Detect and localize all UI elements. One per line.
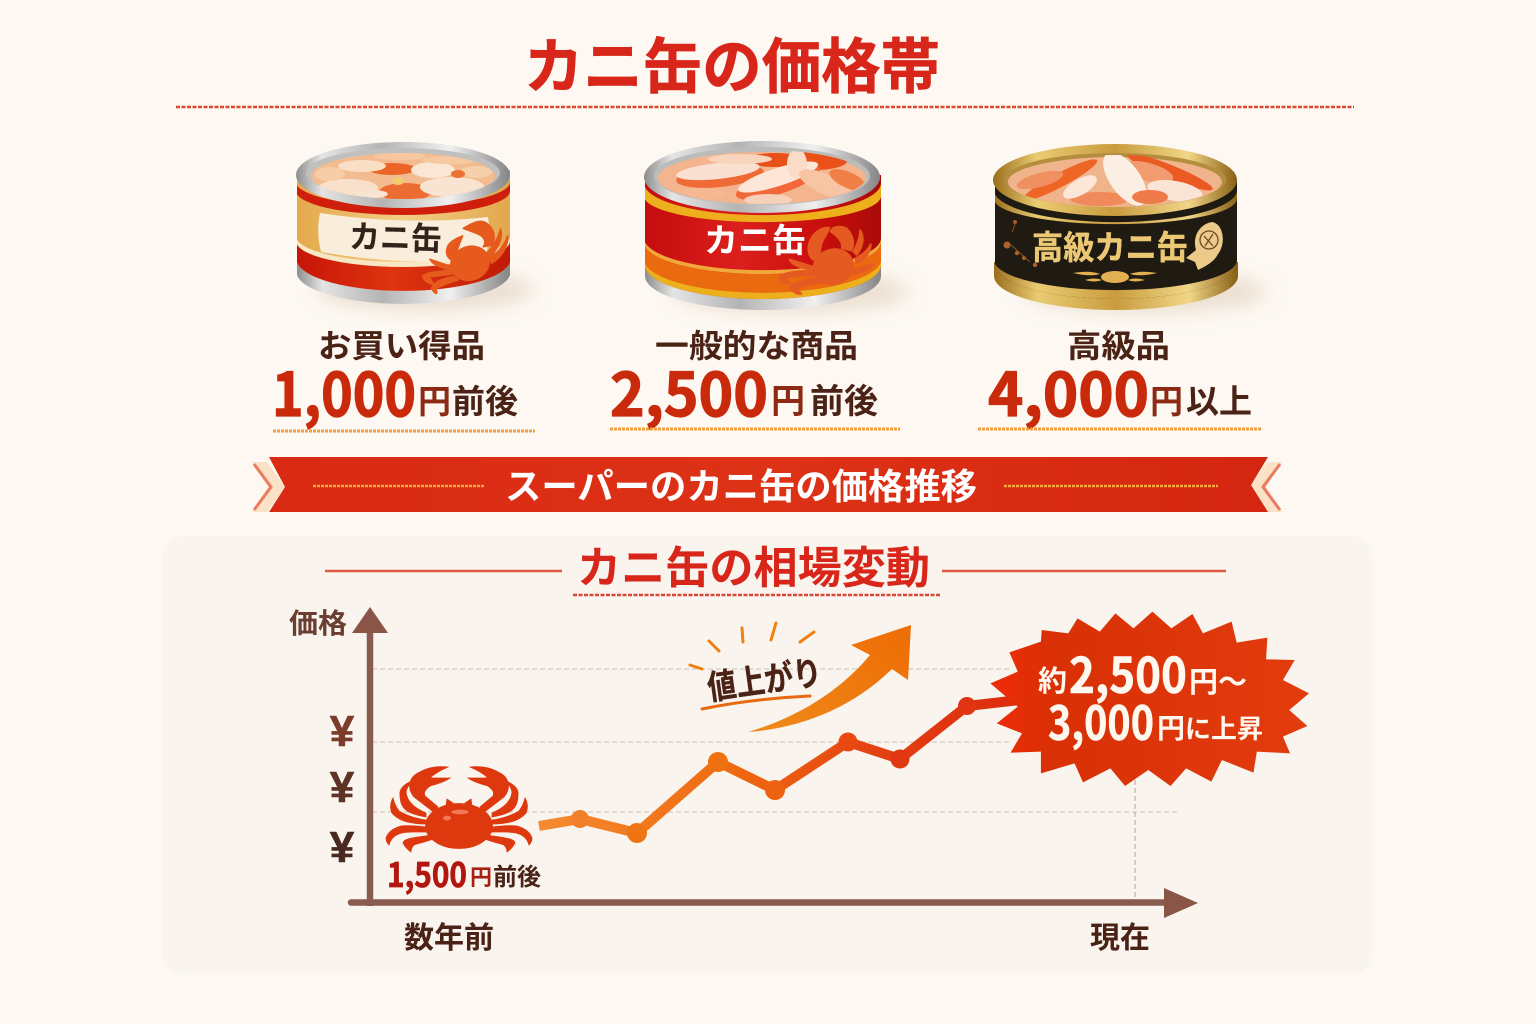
start price label: 1,500 xyxy=(387,848,467,897)
price block: standard: 円 xyxy=(771,383,805,421)
x axis xyxy=(351,888,1198,918)
title: カニ缶の価格帯 xyxy=(524,34,940,101)
rising label xyxy=(690,623,824,709)
can: premium: 高級カニ缶 xyxy=(1032,229,1188,266)
rising arrow xyxy=(748,625,911,732)
banner xyxy=(252,457,1282,512)
axis label: years ago: 数年前 xyxy=(404,922,494,955)
can: standard xyxy=(644,141,908,315)
price block: bargain: 前後 xyxy=(452,383,518,420)
panel: price trend xyxy=(162,536,1372,975)
axis label: price: 価格 xyxy=(289,608,347,639)
starburst callout: 円 xyxy=(1157,713,1185,744)
rising label: 値上がり xyxy=(705,653,824,708)
yen symbols: ¥ xyxy=(330,707,355,756)
icon: crab xyxy=(386,767,532,852)
starburst callout: に上昇 xyxy=(1185,714,1263,744)
yen symbols xyxy=(330,707,355,872)
price block: premium: 以上 xyxy=(1186,383,1252,420)
price block: bargain xyxy=(272,328,535,434)
can: premium xyxy=(993,144,1267,315)
start price label xyxy=(387,848,541,897)
price block: bargain: 1,000 xyxy=(272,347,416,434)
price block: bargain: 円 xyxy=(418,383,451,420)
price block: standard: 一般的な商品 xyxy=(655,328,858,364)
banner: スーパーのカニ缶の価格推移 xyxy=(505,466,977,507)
starburst callout: 3,000 xyxy=(1048,685,1154,754)
yen symbols: ¥ xyxy=(330,763,355,812)
price block: standard: 前後 xyxy=(810,383,878,421)
price block: premium: 高級品 xyxy=(1067,328,1170,364)
can: bargain xyxy=(296,142,533,310)
can: bargain: カニ缶 xyxy=(349,219,442,257)
start price label: 円 xyxy=(470,865,492,890)
start price label: 前後 xyxy=(493,864,541,891)
y axis xyxy=(352,607,388,906)
price block: standard xyxy=(610,328,900,434)
axis label: now: 現在 xyxy=(1090,922,1150,955)
price block: bargain: お買い得品 xyxy=(318,328,485,364)
starburst callout: 円〜 xyxy=(1189,667,1247,699)
panel heading: カニ缶の相場変動 xyxy=(577,544,930,593)
starburst callout: 約 xyxy=(1038,665,1067,698)
price trend line xyxy=(539,697,1020,843)
can: standard: カニ缶 xyxy=(704,222,806,259)
price block: premium: 円 xyxy=(1150,383,1183,420)
yen symbols: ¥ xyxy=(330,823,355,872)
chart grid lines xyxy=(372,669,1180,900)
price block: premium: 4,000 xyxy=(988,347,1149,434)
starburst callout: 2,500 xyxy=(1069,637,1187,708)
price block: standard: 2,500 xyxy=(610,347,768,434)
starburst callout xyxy=(990,612,1309,786)
price block: premium xyxy=(978,328,1262,434)
